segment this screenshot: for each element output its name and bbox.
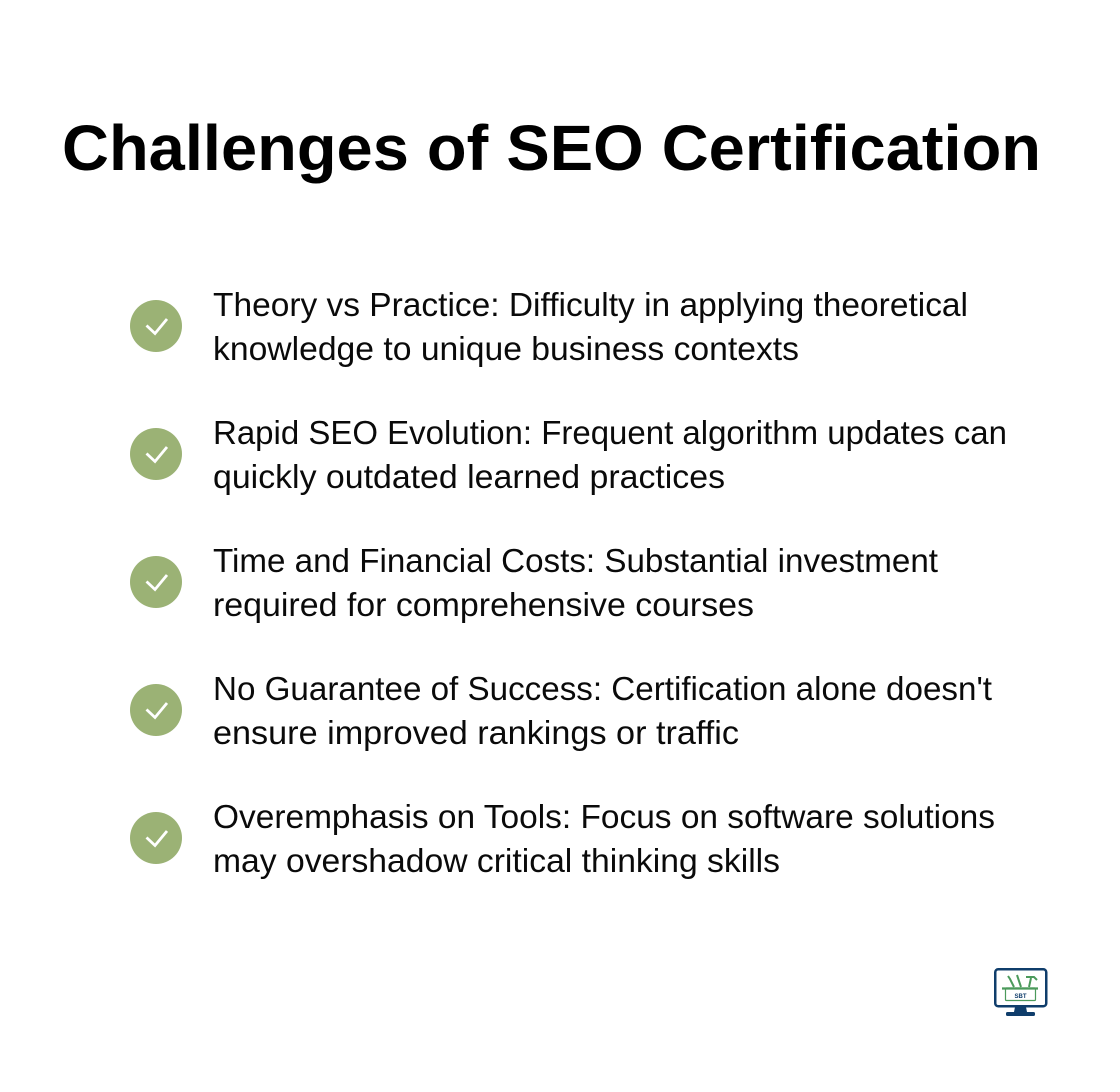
icon: monitor logo with toolbox xyxy=(995,969,1046,1016)
text: Theory vs Practice: knowledge to unique business contexts xyxy=(213,330,799,367)
text: Theory vs Practice xyxy=(213,286,968,367)
text: Overemphasis on Tools: Overemphasis on Tools: Focus on software solutions xyxy=(213,798,995,835)
text: No Guarantee of Success xyxy=(213,670,992,751)
list item: Theory vs Practice xyxy=(130,286,968,367)
list item: Rapid SEO Evolution xyxy=(130,414,1007,495)
icon: check badge 5 xyxy=(130,812,182,864)
icon: check badge 4 xyxy=(130,684,182,736)
list item: Time and Financial Costs xyxy=(130,542,938,623)
text: Rapid SEO Evolution: quickly outdated learned practices xyxy=(213,458,725,495)
text: Time and Financial Costs: Time and Financial Costs: Substantial investment xyxy=(213,542,938,579)
text: No Guarantee of Success: No Guarantee of Success: Certification alone doesn't xyxy=(213,670,992,707)
icon: check badge 3 xyxy=(130,556,182,608)
text: Overemphasis on Tools: may overshadow critical thinking skills xyxy=(213,842,780,879)
text: Overemphasis on Tools xyxy=(213,798,995,879)
text: Rapid SEO Evolution xyxy=(213,414,1007,495)
text: Time and Financial Costs xyxy=(213,542,938,623)
icon: check badge 1 xyxy=(130,300,182,352)
title: Challenges of SEO Certification xyxy=(62,112,1041,184)
text: Rapid SEO Evolution: Rapid SEO Evolution: Frequent algorithm updates can xyxy=(213,414,1007,451)
text: No Guarantee of Success: ensure improved rankings or traffic xyxy=(213,714,739,751)
icon: check badge 2 xyxy=(130,428,182,480)
icon: monitor logo with toolbox: SBT xyxy=(1014,994,1027,1000)
text: Theory vs Practice: Theory vs Practice: Difficulty in applying theoretical xyxy=(213,286,968,323)
list item: No Guarantee of Success xyxy=(130,670,992,751)
list item: Overemphasis on Tools xyxy=(130,798,995,879)
text: Time and Financial Costs: required for comprehensive courses xyxy=(213,586,754,623)
